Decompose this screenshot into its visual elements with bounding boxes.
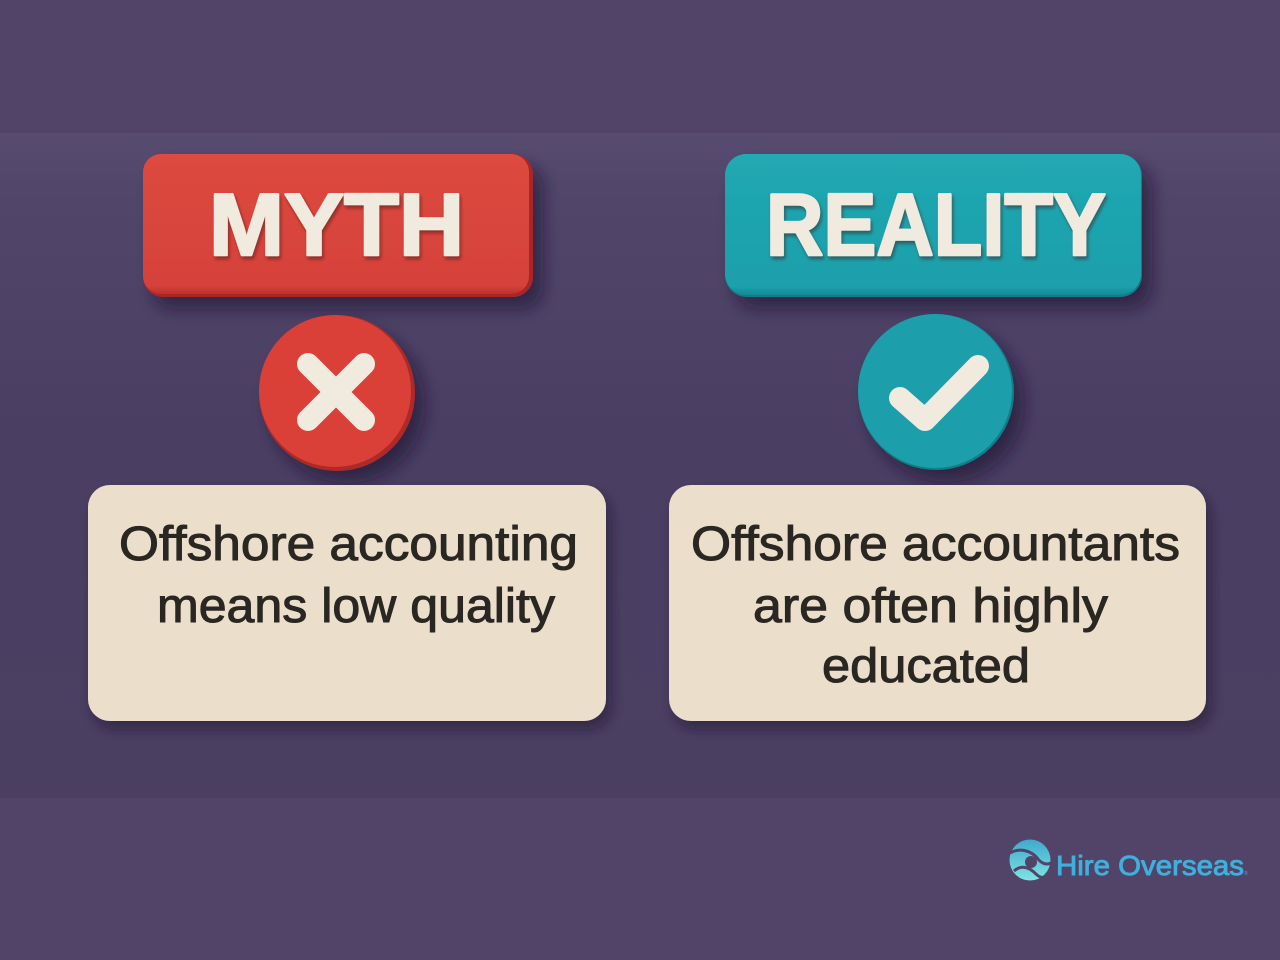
myth badge [143,154,533,297]
panel: reality column [669,154,1206,721]
reality heading: REALITY [766,175,1106,274]
panel: myth column [88,154,606,721]
reality statement text: are often highly [753,580,1108,633]
myth statement text: means low quality [157,580,555,633]
icon: cross [259,315,415,471]
myth statement card [88,485,606,721]
icon: wave globe [1010,840,1051,880]
logo: Hire Overseas [1010,840,1248,881]
logo wordmark: Hire Overseas [1056,850,1244,881]
registered mark: ® [1244,870,1248,877]
myth heading: MYTH [209,175,464,274]
reality statement text [691,518,1180,693]
icon: check [858,314,1014,470]
myth statement text: Offshore accounting [119,518,578,571]
reality statement text: Offshore accountants [691,518,1180,571]
myth statement text [119,518,578,633]
reality badge [725,154,1142,297]
reality statement text: educated [822,640,1030,693]
reality statement card [669,485,1206,721]
